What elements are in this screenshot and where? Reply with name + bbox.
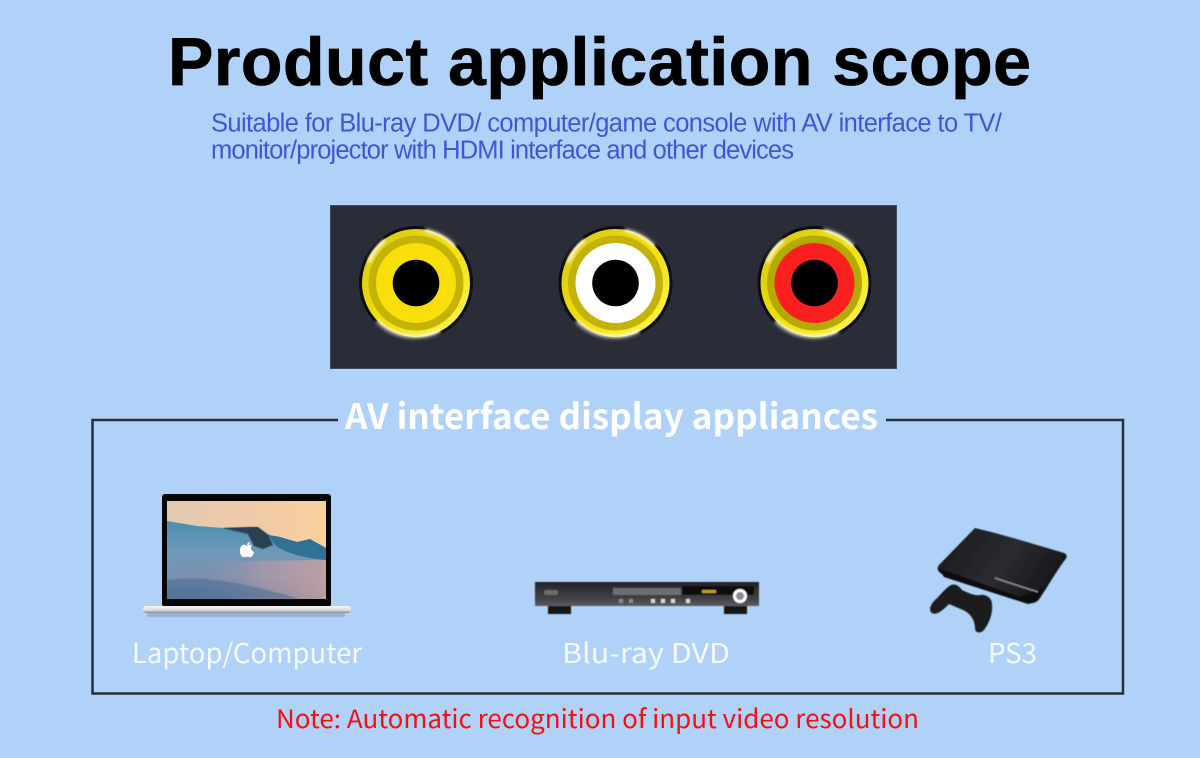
icon: PS3 console and controller: [930, 528, 1067, 632]
subtitle: monitor/projector with HDMI interface and other devices: [211, 136, 794, 164]
note: Note: Automatic recognition of input video resolution: [276, 699, 919, 736]
console: [938, 528, 1067, 603]
label: PS3: PS3: [988, 631, 1037, 671]
icon: Blu-ray DVD player: [535, 582, 759, 614]
title: Product application scope: [168, 24, 1031, 100]
subtitle: Suitable for Blu-ray DVD/ computer/game console with AV interface to TV/: [211, 110, 1003, 138]
controller: [930, 584, 992, 632]
label: DVD: Blu-ray DVD: [562, 631, 730, 671]
panel: AV sockets: [330, 206, 896, 368]
icon: logo: [240, 542, 254, 557]
socket: white audio: [558, 226, 672, 340]
label: laptop: Laptop/Computer: [132, 631, 362, 671]
frame heading: AV interface display appliances: [344, 389, 878, 440]
icon: laptop: [143, 494, 351, 617]
socket: red audio: [758, 226, 872, 340]
appliances frame: [92, 420, 1123, 694]
socket: yellow video: [359, 226, 473, 340]
subtitle: [211, 110, 1003, 164]
